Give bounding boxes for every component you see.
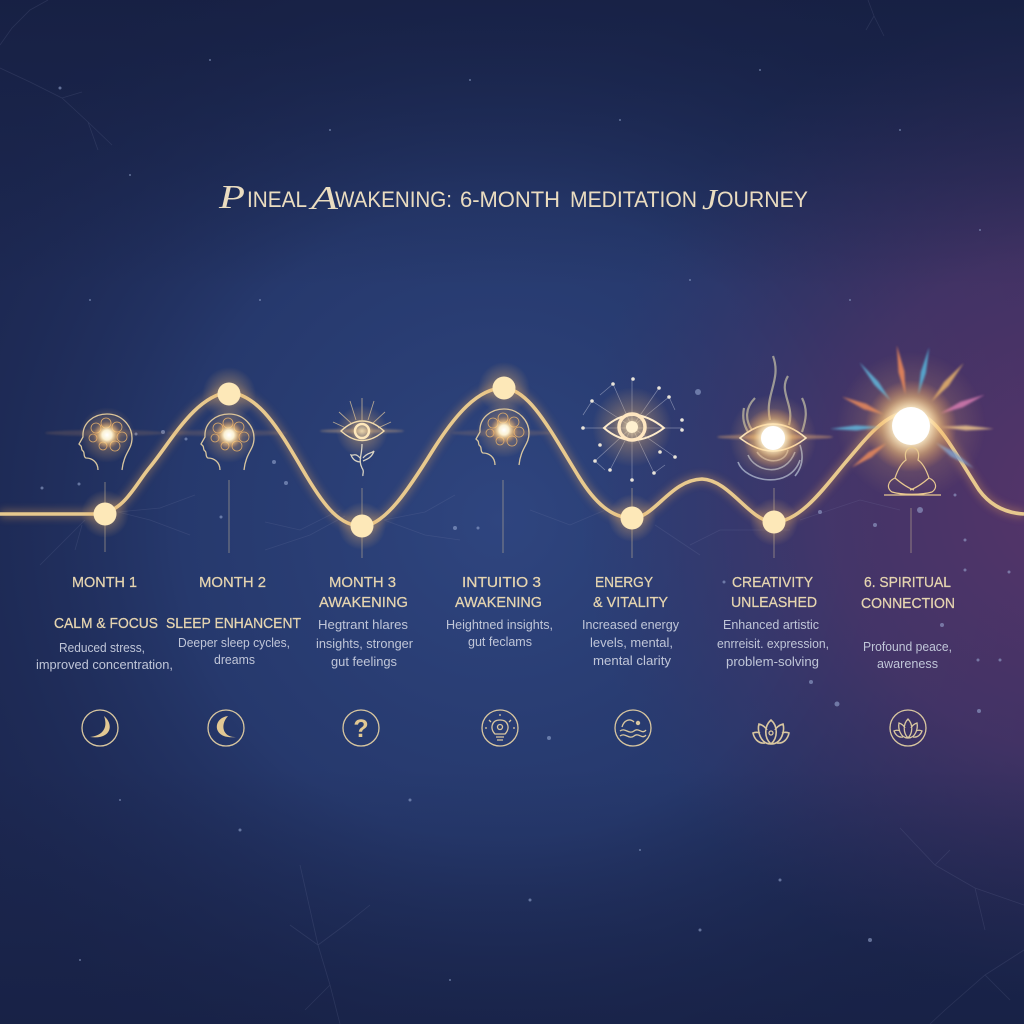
step 3: month 3 awakening [316,574,413,746]
icon: lotus in circle [890,710,926,746]
icon: waves [615,710,651,746]
step 7: spiritual connection [861,574,955,746]
heading: sleep: SLEEP ENHANCENT [166,615,301,632]
description: enrreisit. expression, [717,637,829,651]
heading: AWAKENING [319,594,408,611]
description: Profound peace, [863,640,952,654]
icon: light bulb [482,710,518,746]
heading: month 1: MONTH 1 [72,574,137,591]
heading: ENERGY [595,574,653,591]
heading: month 2: MONTH 2 [199,574,266,591]
illustration: eye with constellation network [581,377,684,482]
title: INEAL [247,187,307,212]
step 1: calm and focus [36,574,173,746]
heading [593,574,668,611]
timeline curve [0,388,1024,526]
heading [731,574,817,611]
node connector lines [105,480,911,558]
illustration: head with glowing brain, month 4 [452,402,552,465]
heading: INTUITIO 3 [462,574,541,591]
step 5: energy and vitality [582,574,680,746]
icon: crescent moon [208,710,244,746]
heading: CONNECTION [861,595,955,612]
description: gut feclams [468,635,532,649]
description [717,618,829,669]
description [582,618,680,668]
icon: lotus [753,720,789,744]
description: awareness [877,657,938,671]
heading [319,574,408,611]
description: Hegtrant hlares [318,618,408,632]
title: OURNEY [717,187,808,212]
step 6: creativity unleashed [717,574,829,744]
description: insights, stronger [316,637,413,651]
description: Increased energy [582,618,680,632]
title: J [702,185,719,216]
description: improved concentration, [36,658,173,672]
illustration: eye with flames and swirls [717,356,833,482]
timeline nodes [81,362,798,550]
step 2: sleep enhancement [166,574,301,746]
heading [861,574,955,612]
description: Deeper sleep cycles, [178,636,290,650]
description [178,636,290,667]
description [36,641,173,672]
heading: UNLEASHED [731,594,817,611]
heading: CREATIVITY [732,574,813,591]
illustration: radiant burst with meditating figure [830,345,994,501]
description [316,618,413,669]
icon: crescent moon [82,710,118,746]
heading: calm and focus: CALM & FOCUS [54,615,158,632]
heading: & VITALITY [593,594,668,611]
description: mental clarity [593,654,672,668]
description: Enhanced artistic [723,618,819,632]
heading: 6. SPIRITUAL [864,574,951,591]
icon: question mark: ? [353,715,369,743]
heading: MONTH 3 [329,574,396,591]
step 4: intuition awakening [446,574,553,746]
description [863,640,952,671]
title: MEDITATION [570,187,697,212]
description [446,618,553,649]
icon: question mark [343,710,379,746]
description: problem-solving [726,655,819,669]
title: P [218,179,245,216]
illustration: head with glowing brain, month 1 [45,407,165,470]
description: gut feelings [331,655,397,669]
title: 6-MONTH [460,187,560,212]
description: levels, mental, [590,636,673,650]
description: Heightned insights, [446,618,553,632]
description: Reduced stress, [59,641,145,655]
heading: AWAKENING [455,594,542,611]
title [218,179,808,217]
description: dreams [214,653,255,667]
title: WAKENING: [335,187,452,212]
illustration: radiant eye flower, month 3 [320,398,404,476]
title: A [308,180,338,217]
heading [455,574,542,611]
illustration: head with glowing brain, month 2 [167,407,287,470]
nerve filaments around the curve [40,495,900,565]
